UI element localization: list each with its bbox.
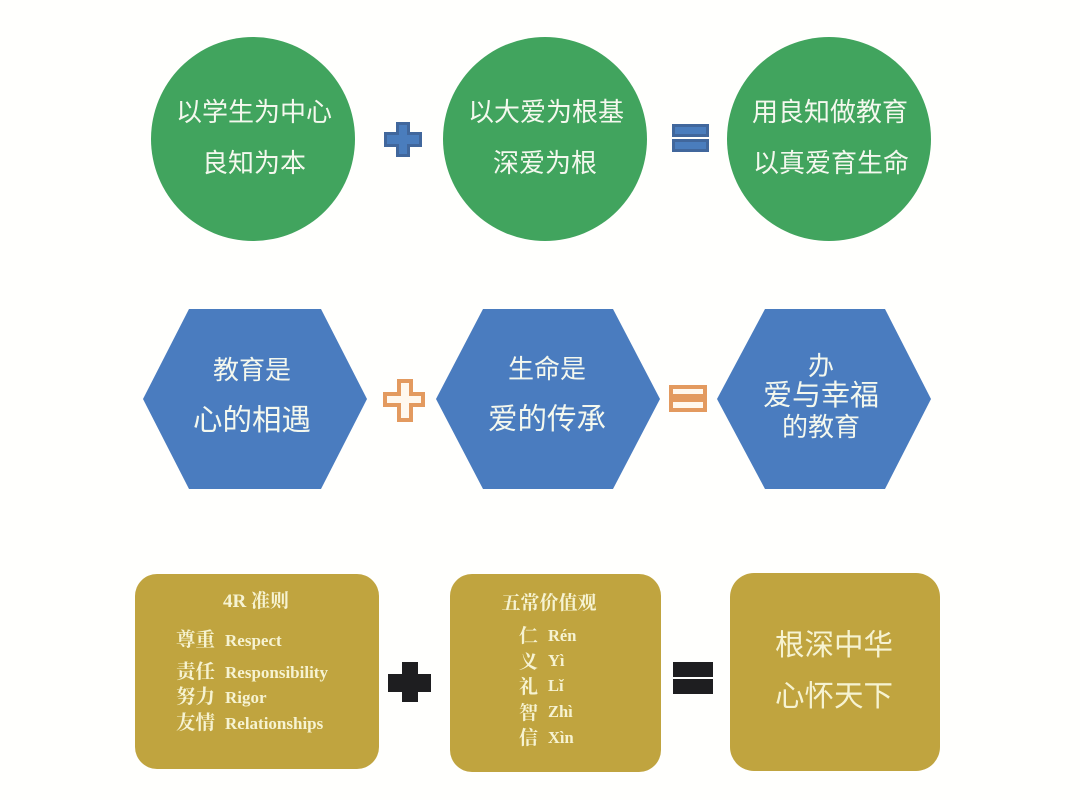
panel: rooted in China: 根深中华 <box>775 629 893 662</box>
panel: 4R principles: Relationships <box>225 714 324 733</box>
row 1: green circles equation <box>151 37 931 241</box>
panel: five constant values: Lǐ <box>548 676 564 695</box>
panel: 4R principles <box>135 574 379 769</box>
panel: rooted in China <box>730 573 940 771</box>
panel: 4R principles: 4R 准则 <box>223 590 289 612</box>
panel: five constant values: 仁 <box>519 625 538 647</box>
hexagon: meeting of hearts: 教育是 <box>213 355 291 385</box>
panel: five constant values: Yì <box>548 651 565 670</box>
panel: five constant values: 智 <box>519 702 538 724</box>
hexagon: inheritance of love <box>436 309 660 489</box>
hexagon: love and happiness education: 爱与幸福 <box>763 379 879 412</box>
icon: black equals <box>673 662 713 694</box>
panel: 4R principles: Rigor <box>225 688 267 707</box>
circle: education with conscience: 以真爱育生命 <box>753 148 909 178</box>
panel: five constant values: 信 <box>519 727 538 749</box>
panel: 4R principles: 努力 <box>176 686 215 708</box>
row 3: gold boxes equation <box>135 573 940 772</box>
hexagon: inheritance of love: 生命是 <box>508 354 586 384</box>
panel: rooted in China: 心怀天下 <box>775 680 893 713</box>
panel: 4R principles: Responsibility <box>225 663 328 682</box>
circle: student centered <box>151 37 355 241</box>
panel: five constant values: Xìn <box>548 728 574 747</box>
hexagon: love and happiness education: 办 <box>808 351 834 381</box>
icon: orange outline equals <box>671 387 705 410</box>
icon: black plus <box>388 662 431 702</box>
panel: 4R principles: 友情 <box>176 712 216 734</box>
panel: five constant values: 礼 <box>519 676 538 698</box>
hexagon: inheritance of love: 爱的传承 <box>488 403 606 436</box>
circle: student centered: 以学生为中心 <box>176 97 332 127</box>
hexagon: meeting of hearts: 心的相遇 <box>193 404 311 437</box>
circle: education with conscience <box>727 37 931 241</box>
circle: great love <box>443 37 647 241</box>
panel: five constant values: Zhì <box>548 702 573 721</box>
icon: blue equals <box>672 124 709 152</box>
panel: five constant values <box>450 574 661 772</box>
row 2: blue hexagons equation <box>143 309 931 489</box>
panel: 4R principles: 责任 <box>176 661 216 683</box>
icon: blue plus <box>384 122 422 157</box>
panel: five constant values: 义 <box>519 652 538 673</box>
circle: student centered: 良知为本 <box>202 148 306 178</box>
hexagon: love and happiness education <box>717 309 931 489</box>
panel: 4R principles: 尊重 <box>176 628 215 651</box>
hexagon: love and happiness education: 的教育 <box>782 412 860 442</box>
panel: five constant values: 五常价值观 <box>501 592 597 614</box>
circle: great love: 深爱为根 <box>493 148 597 178</box>
panel: five constant values: Rén <box>548 626 576 645</box>
circle: great love: 以大爱为根基 <box>468 97 624 127</box>
icon: orange outline plus <box>385 381 423 420</box>
hexagon: meeting of hearts <box>143 309 367 489</box>
circle: education with conscience: 用良知做教育 <box>752 97 908 127</box>
panel: 4R principles: Respect <box>225 631 282 650</box>
